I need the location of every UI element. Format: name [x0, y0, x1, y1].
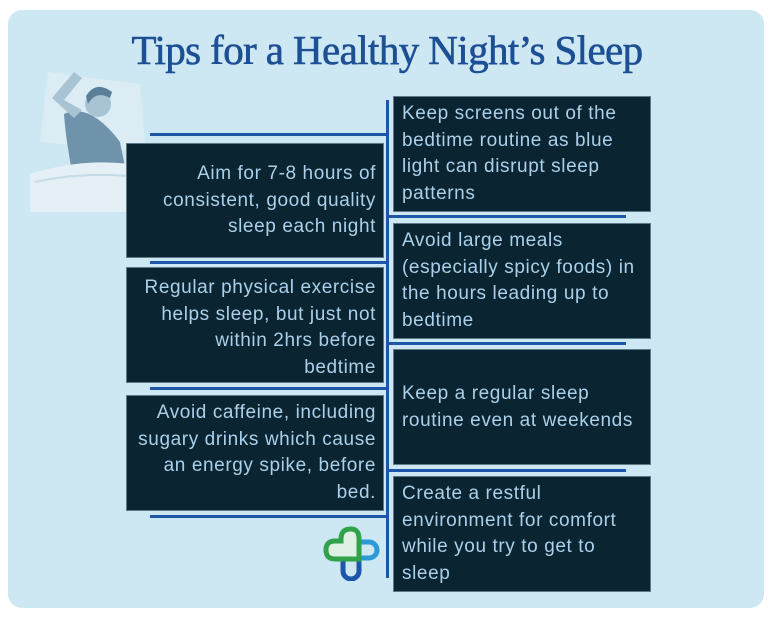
right tip 4: environment for comfort [402, 510, 616, 530]
connector lines [386, 100, 389, 578]
left tip 1 [127, 144, 383, 257]
left tip 1: sleep each night [228, 216, 376, 237]
left tip 2: Regular physical exercise [144, 277, 376, 298]
left tip 1: consistent, good quality [163, 190, 376, 210]
right tip 4 [394, 477, 650, 591]
right tip 2: bedtime [402, 310, 474, 330]
right tip 2 [394, 224, 650, 338]
right tip 1 [394, 97, 650, 211]
right tip 4: while you try to get to [402, 536, 595, 557]
left tip 2: bedtime [304, 356, 376, 378]
right tip 1: Keep screens out of the [402, 103, 616, 124]
icon: health cross logo [324, 526, 380, 581]
left tip 3 [127, 396, 383, 510]
left tip 3: bed. [337, 482, 376, 502]
right tip 1: patterns [402, 182, 475, 204]
right tip 2: Avoid large meals [402, 230, 563, 251]
right tip 3: routine even at weekends [402, 410, 633, 430]
right tip 3: Keep a regular sleep [402, 383, 589, 404]
right tip 4: Create a restful [402, 483, 542, 504]
right tip 3 [394, 350, 650, 464]
right tip 2: the hours leading up to [402, 283, 609, 304]
right tip 2: (especially spicy foods) in [402, 256, 635, 278]
right tip 1: light can disrupt sleep [402, 156, 600, 177]
title: Tips for a Healthy Night’s Sleep [131, 27, 643, 73]
left tip 3: an energy spike, before [164, 455, 376, 476]
left tip 3: Avoid caffeine, including [157, 402, 376, 423]
left tip 2: helps sleep, but just not [161, 304, 376, 324]
illustration: sleeping person [30, 72, 145, 212]
right tip 4: sleep [402, 562, 450, 584]
left tip 2: within 2hrs before [215, 330, 376, 351]
right tip 1: bedtime routine as blue [402, 130, 613, 150]
left tip 1: Aim for 7-8 hours of [197, 163, 376, 184]
left tip 2 [127, 268, 383, 382]
left tip 3: sugary drinks which cause [138, 428, 376, 450]
